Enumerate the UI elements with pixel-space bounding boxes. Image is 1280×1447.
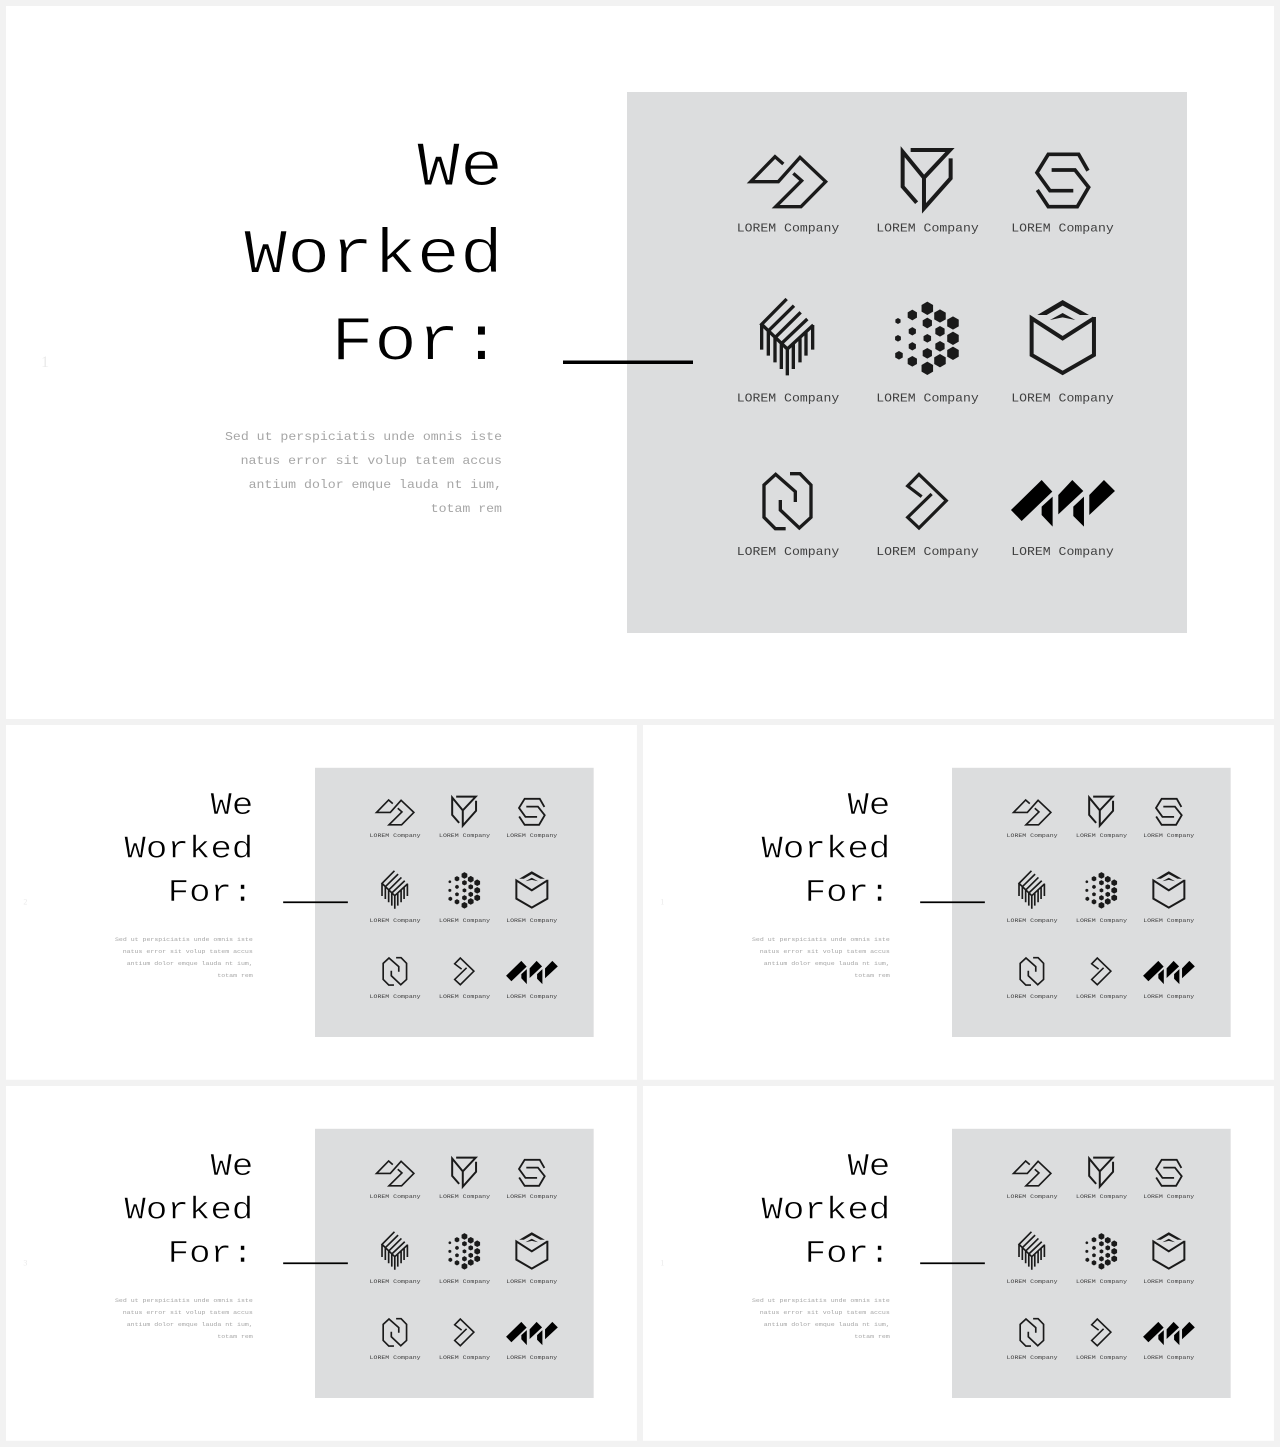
title: Worked (761, 833, 890, 868)
body text: Sed ut perspiciatis unde omnis iste (225, 430, 502, 444)
slide 1: large slide (6, 6, 1274, 719)
logo grid: LOREM Company (506, 1278, 558, 1285)
title: Worked (124, 1194, 253, 1229)
logo grid: LOREM Company (370, 993, 421, 1000)
panel: logos (315, 768, 594, 1037)
logo grid: LOREM Company (506, 1354, 558, 1361)
label: LOREM Company (737, 222, 839, 236)
logo grid: LOREM Company (1076, 1354, 1128, 1361)
logo grid: LOREM Company (439, 832, 491, 839)
label: LOREM Company (737, 392, 839, 406)
logo grid: LOREM Company (370, 832, 421, 839)
logo: chevron (908, 474, 946, 528)
logo grid: LOREM Company (1076, 1193, 1128, 1200)
label: LOREM Company (737, 546, 839, 559)
title (124, 789, 253, 911)
body text: totam rem (217, 972, 253, 979)
logo grid: LOREM Company (1007, 917, 1058, 924)
logo: hexagon S (1037, 154, 1089, 207)
body text: Sed ut perspiciatis unde omnis iste (115, 1297, 253, 1304)
logo grid: LOREM Company (439, 993, 491, 1000)
slide 4: small slide bottom left (6, 1086, 637, 1441)
slide 2: small slide top left (6, 725, 637, 1080)
label: LOREM Company (1011, 222, 1114, 236)
page number: 1 (41, 354, 49, 371)
logo grid: LOREM Company (1143, 1193, 1195, 1200)
logo grid: LOREM Company (1143, 1278, 1195, 1285)
logo grid: LOREM Company (506, 917, 558, 924)
logo: M blocks (1011, 480, 1115, 527)
logo: shield Y (903, 150, 951, 208)
logo grid: LOREM Company (1076, 832, 1128, 839)
title (124, 1150, 253, 1272)
logo: N hexagon (764, 474, 811, 529)
connector line (920, 1262, 985, 1264)
logo grid: LOREM Company (506, 993, 558, 1000)
connector line (283, 1262, 348, 1264)
logo grid: LOREM Company (370, 1278, 421, 1285)
logo grid: LOREM Company (1007, 993, 1058, 1000)
logo grid: LOREM Company (1143, 993, 1195, 1000)
body text: antium dolor emque lauda nt ium, (127, 960, 253, 967)
title (761, 789, 890, 911)
slide 3: small slide top right (643, 725, 1274, 1080)
title (761, 1150, 890, 1272)
title: For: (805, 876, 890, 911)
page number: 2 (23, 898, 27, 907)
label: LOREM Company (1011, 392, 1114, 406)
body text: natus error sit volup tatem accus (760, 1309, 890, 1316)
logo: striped cube (762, 299, 813, 375)
logo grid: LOREM Company (1007, 832, 1058, 839)
body text (752, 936, 890, 979)
slide 5: small slide bottom right (643, 1086, 1274, 1441)
page number: 1 (660, 898, 664, 907)
body text: natus error sit volup tatem accus (123, 948, 253, 955)
title: For: (805, 1237, 890, 1272)
logo grid (370, 797, 558, 1000)
body text: totam rem (854, 1333, 890, 1340)
label: LOREM Company (876, 392, 979, 406)
logo grid: LOREM Company (1143, 917, 1195, 924)
body text: natus error sit volup tatem accus (760, 948, 890, 955)
logo grid: LOREM Company (370, 1354, 421, 1361)
logo grid (1007, 797, 1195, 1000)
page number: 3 (23, 1259, 27, 1268)
logo grid: LOREM Company (439, 1278, 491, 1285)
page number: 1 (660, 1259, 664, 1268)
title: We (417, 133, 503, 204)
logo: hexagon dots (895, 302, 959, 375)
logo grid: LOREM Company (370, 917, 421, 924)
title: For: (168, 1237, 253, 1272)
body text: totam rem (431, 502, 502, 516)
label: LOREM Company (1011, 546, 1114, 559)
logo grid: LOREM Company (1076, 1278, 1128, 1285)
logo grid: LOREM Company (370, 1193, 421, 1200)
body text: totam rem (854, 972, 890, 979)
body text: Sed ut perspiciatis unde omnis iste (752, 1297, 890, 1304)
title: For: (331, 308, 503, 378)
body text (752, 1297, 890, 1340)
body text (115, 936, 253, 979)
title: We (848, 789, 890, 824)
logo: open box (1032, 300, 1094, 373)
logo grid: LOREM Company (1007, 1193, 1058, 1200)
title: Worked (761, 1194, 890, 1229)
title (244, 133, 503, 378)
body text: antium dolor emque lauda nt ium, (249, 478, 502, 492)
body text (115, 1297, 253, 1340)
logo grid (1007, 1158, 1195, 1361)
body text: antium dolor emque lauda nt ium, (764, 960, 890, 967)
connector line (283, 901, 348, 903)
panel: logos (952, 1129, 1231, 1398)
title: We (211, 1150, 253, 1185)
panel: logos (315, 1129, 594, 1398)
label: LOREM Company (876, 546, 979, 559)
logo grid: LOREM Company (439, 917, 491, 924)
logo grid: LOREM Company (1143, 1354, 1195, 1361)
body text: natus error sit volup tatem accus (241, 454, 502, 468)
logo grid: LOREM Company (439, 1354, 491, 1361)
body text (225, 430, 502, 516)
body text: antium dolor emque lauda nt ium, (764, 1321, 890, 1328)
body text: totam rem (217, 1333, 253, 1340)
logo grid: LOREM Company (439, 1193, 491, 1200)
logo grid: LOREM Company (1076, 917, 1128, 924)
logo grid: LOREM Company (1143, 832, 1195, 839)
logo grid: LOREM Company (1076, 993, 1128, 1000)
body text: Sed ut perspiciatis unde omnis iste (115, 936, 253, 943)
logo grid: LOREM Company (506, 1193, 558, 1200)
panel: logos (627, 92, 1187, 633)
body text: Sed ut perspiciatis unde omnis iste (752, 936, 890, 943)
logo grid (370, 1158, 558, 1361)
label: LOREM Company (876, 222, 979, 236)
logo grid: LOREM Company (506, 832, 558, 839)
title: Worked (124, 833, 253, 868)
title: We (848, 1150, 890, 1185)
body text: antium dolor emque lauda nt ium, (127, 1321, 253, 1328)
title: For: (168, 876, 253, 911)
logo grid: LOREM Company (1007, 1354, 1058, 1361)
title: We (211, 789, 253, 824)
logo: arrows (751, 157, 826, 207)
body text: natus error sit volup tatem accus (123, 1309, 253, 1316)
title: Worked (244, 220, 503, 292)
connector line (920, 901, 985, 903)
logo grid: LOREM Company (1007, 1278, 1058, 1285)
connector line (563, 360, 693, 364)
panel: logos (952, 768, 1231, 1037)
